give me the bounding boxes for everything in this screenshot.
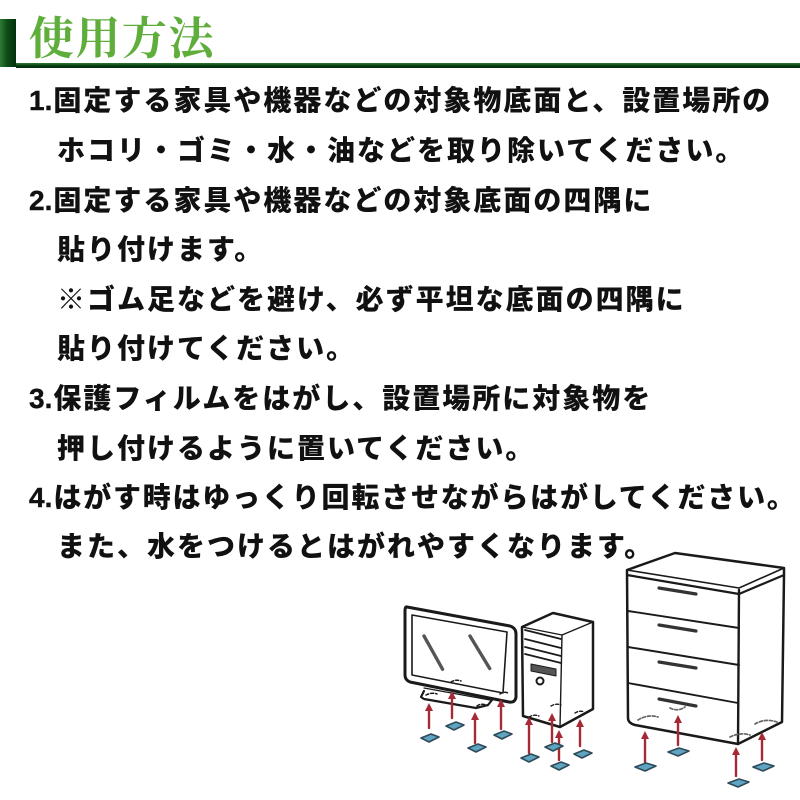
pads: blue adhesive pads (421, 722, 774, 787)
step 2 note line 1: ※ゴム足などを避け、必ず平坦な底面の四隅に (57, 284, 686, 315)
instructions text (29, 85, 797, 562)
title: 使用方法 (29, 14, 215, 64)
icon: chest of drawers (627, 553, 784, 744)
step 1 line 1: 1.固定する家具や機器などの対象物底面と、設置場所の (29, 85, 772, 116)
step 2 line 1: 2.固定する家具や機器などの対象底面の四隅に (29, 185, 653, 216)
step 1 line 2: ホコリ・ゴミ・水・油などを取り除いてください。 (57, 135, 745, 166)
step 2 note line 2: 貼り付けてください。 (57, 333, 356, 364)
step 3 line 1: 3.保護フィルムをはがし、設置場所に対象物を (29, 383, 652, 414)
step 2 line 2: 貼り付けます。 (57, 234, 264, 265)
green accent block (0, 19, 16, 67)
stand (421, 691, 492, 708)
icon: monitor (405, 607, 516, 708)
arrows: red lift arrows (429, 694, 762, 776)
title underline (16, 63, 800, 68)
step 4 line 2: また、水をつけるとはがれやすくなります。 (57, 531, 654, 562)
step 4 line 1: 4.はがす時はゆっくり回転させながらはがしてください。 (29, 482, 797, 513)
header band (0, 14, 800, 68)
icon: PC tower (522, 613, 593, 727)
step 3 line 2: 押し付けるように置いてください。 (57, 433, 535, 464)
